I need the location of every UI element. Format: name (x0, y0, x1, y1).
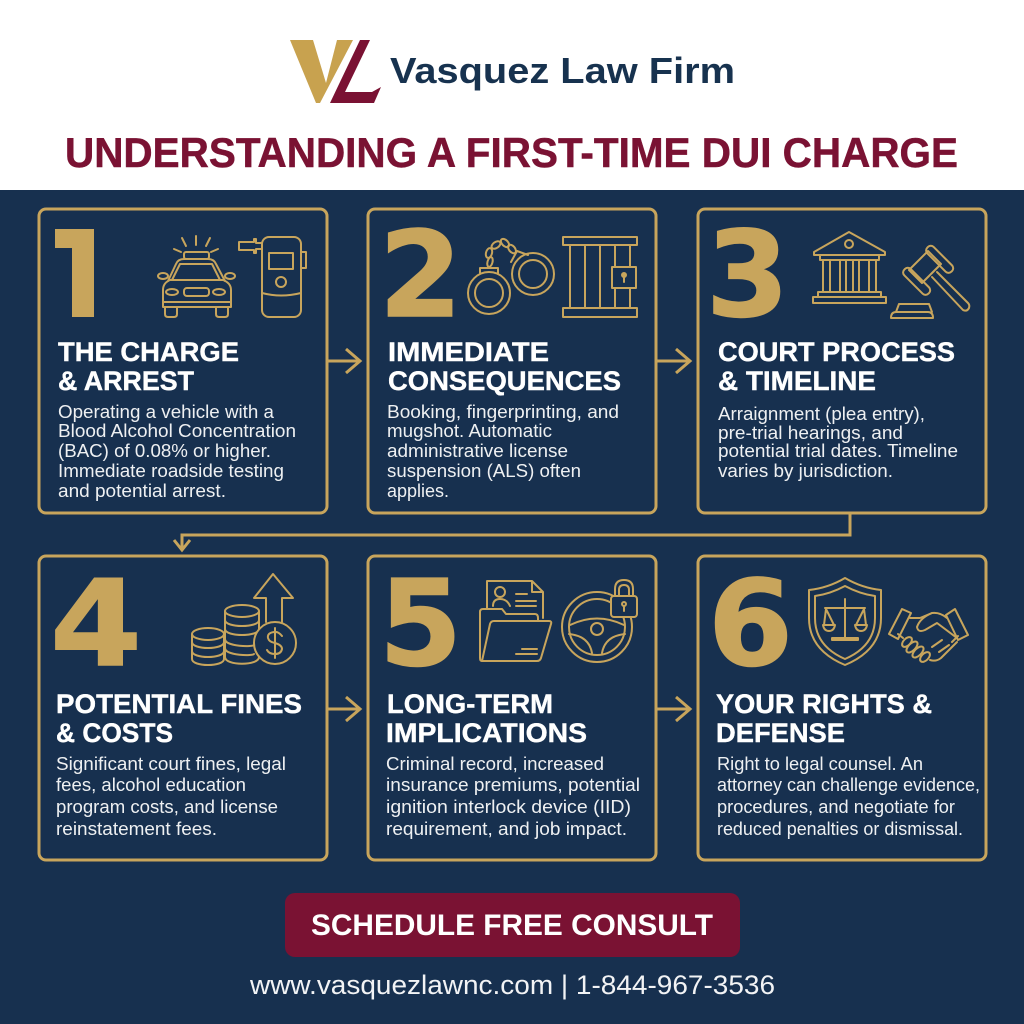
description (386, 754, 640, 839)
heading: YOUR RIGHTS & (716, 689, 932, 719)
heading (388, 337, 621, 396)
description: mugshot. Automatic (387, 421, 552, 441)
logo: Vasquez Law Firm (290, 40, 735, 103)
heading (58, 337, 239, 396)
heading (386, 689, 587, 748)
description (56, 754, 286, 839)
number 4: 4 (50, 556, 142, 694)
contact line: www.vasquezlawnc.com | 1-844-967-3536 (249, 970, 775, 1000)
heading: IMMEDIATE (388, 337, 549, 367)
description: program costs, and license (56, 797, 278, 817)
heading (718, 337, 955, 396)
heading: LONG-TERM (387, 689, 553, 719)
icon: record folder (480, 581, 551, 661)
panel: step 2 immediate consequences (368, 207, 656, 513)
title: UNDERSTANDING A FIRST-TIME DUI CHARGE (65, 129, 958, 176)
arrow: step 5 to 6 (656, 697, 690, 721)
heading: POTENTIAL FINES (56, 689, 302, 719)
description: Significant court fines, legal (56, 754, 286, 774)
description: administrative license (387, 441, 568, 461)
number 5: 5 (379, 556, 462, 694)
description: procedures, and negotiate for (717, 797, 955, 817)
description (387, 402, 619, 501)
description: Criminal record, increased (386, 754, 604, 774)
icon: breathalyzer (239, 237, 306, 317)
logo mark: VL monogram (290, 40, 381, 103)
icon: coins and rising arrow (192, 574, 296, 665)
icon: locked steering wheel (562, 580, 637, 662)
arrow: step 1 to 2 (327, 349, 360, 373)
description: Booking, fingerprinting, and (387, 402, 619, 422)
panel: step 3 court process and timeline (698, 207, 986, 513)
description: applies. (387, 481, 449, 501)
call to action button (285, 893, 740, 957)
icon: handshake (889, 609, 968, 664)
description: potential trial dates. Timeline (718, 441, 958, 461)
arrow: step 4 to 5 (327, 697, 360, 721)
description: pre-trial hearings, and (718, 423, 903, 443)
heading: THE CHARGE (58, 337, 239, 367)
heading: CONSEQUENCES (388, 366, 621, 396)
description: Arraignment (plea entry), (718, 404, 925, 424)
arrow: step 2 to 3 (656, 349, 690, 373)
number 1: 1 (40, 208, 123, 346)
heading: & ARREST (58, 366, 194, 396)
description: attorney can challenge evidence, (717, 775, 980, 795)
number 2: 2 (379, 207, 462, 345)
icon: handcuffs (468, 237, 554, 314)
heading (716, 689, 932, 748)
description (717, 754, 980, 839)
panel: step 4 potential fines and costs (39, 556, 327, 860)
description: Right to legal counsel. An (717, 754, 923, 774)
number 6: 6 (708, 556, 793, 694)
icon: courthouse (813, 232, 886, 303)
description: reinstatement fees. (56, 819, 217, 839)
description: insurance premiums, potential (386, 775, 640, 795)
heading: COURT PROCESS (718, 337, 955, 367)
icon: gavel (891, 244, 969, 318)
description: requirement, and job impact. (386, 819, 627, 839)
heading: & COSTS (56, 718, 173, 748)
description: fees, alcohol education (56, 775, 246, 795)
description: varies by jurisdiction. (718, 461, 893, 481)
number 3: 3 (706, 207, 789, 345)
description: Immediate roadside testing (58, 461, 284, 481)
description (718, 404, 958, 481)
description: Blood Alcohol Concentration (58, 421, 296, 441)
description (58, 402, 296, 501)
heading: IMPLICATIONS (386, 718, 587, 748)
heading: & TIMELINE (718, 366, 876, 396)
arrow: step 3 to 4 connector (174, 513, 850, 550)
icon: jail cell (563, 237, 637, 317)
description: ignition interlock device (IID) (386, 797, 631, 817)
description: and potential arrest. (58, 481, 226, 501)
panel: step 5 long-term implications (368, 556, 656, 860)
description: (BAC) of 0.08% or higher. (58, 441, 271, 461)
panel: step 6 your rights and defense (698, 556, 986, 860)
icon: police car (158, 236, 235, 317)
call to action button: SCHEDULE FREE CONSULT (311, 909, 713, 942)
icon: shield with scales (809, 578, 881, 665)
firm name: Vasquez Law Firm (390, 50, 735, 91)
heading: DEFENSE (716, 718, 845, 748)
description: reduced penalties or dismissal. (717, 819, 963, 839)
number 1 (55, 229, 94, 317)
panel: step 1 the charge and arrest (39, 208, 327, 513)
description: Operating a vehicle with a (58, 402, 275, 422)
heading (56, 689, 302, 748)
description: suspension (ALS) often (387, 461, 581, 481)
